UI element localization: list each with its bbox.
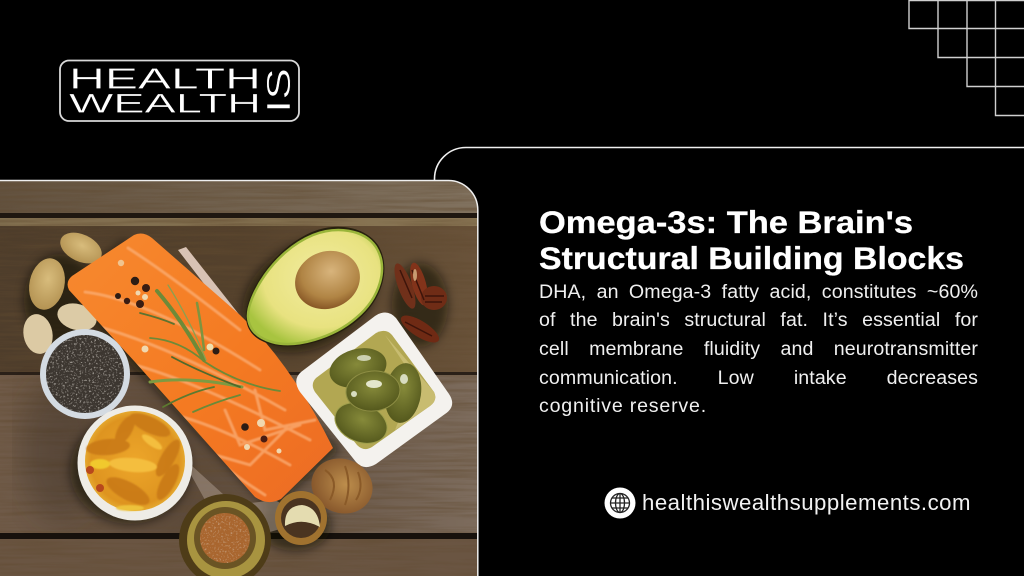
website address: healthiswealthsupplements.com: [642, 490, 971, 515]
body paragraph: communication. Low intake decreases: [539, 367, 978, 389]
photo panel outline: [0, 180, 478, 576]
parchment paper: [178, 247, 280, 532]
bowl of chia seeds: [40, 329, 130, 419]
pecans: [394, 262, 447, 342]
almonds and nuts: [23, 232, 102, 354]
logo: Health Is Wealth: WEALTH: [69, 88, 261, 118]
wooden table planks: [0, 180, 478, 576]
salmon fillet: [68, 234, 333, 502]
bowl of omega-3 capsules: [78, 406, 192, 520]
logo: Health Is Wealth: [60, 60, 299, 121]
heading: Omega-3s: The Brain's: [539, 204, 913, 240]
food photo panel: [0, 180, 478, 576]
icon: globe: [604, 488, 636, 518]
body paragraph: cognitive reserve.: [539, 395, 707, 417]
body paragraph: cell membrane fluidity and neurotransmitter: [539, 338, 978, 360]
logo: Health Is Wealth: IS: [260, 68, 297, 113]
heading: [539, 204, 964, 276]
body paragraph: [539, 280, 978, 417]
outlined content panel: [434, 148, 1024, 190]
shadows under the food: [24, 214, 448, 551]
dish of olives: [296, 312, 452, 467]
heading: Structural Building Blocks: [539, 240, 964, 276]
logo: Health Is Wealth: HEALTH: [69, 64, 261, 96]
walnuts: [275, 458, 372, 545]
peppercorns: [115, 260, 282, 454]
corner grid decoration: [909, 0, 1024, 116]
avocado half: [246, 227, 384, 347]
body paragraph: of the brain's structural fat. It’s essential for: [539, 309, 978, 331]
body paragraph: DHA, an Omega-3 fatty acid, constitutes ~60%: [539, 280, 978, 302]
glass spice jar: [179, 494, 271, 576]
rosemary sprig: [140, 285, 280, 412]
